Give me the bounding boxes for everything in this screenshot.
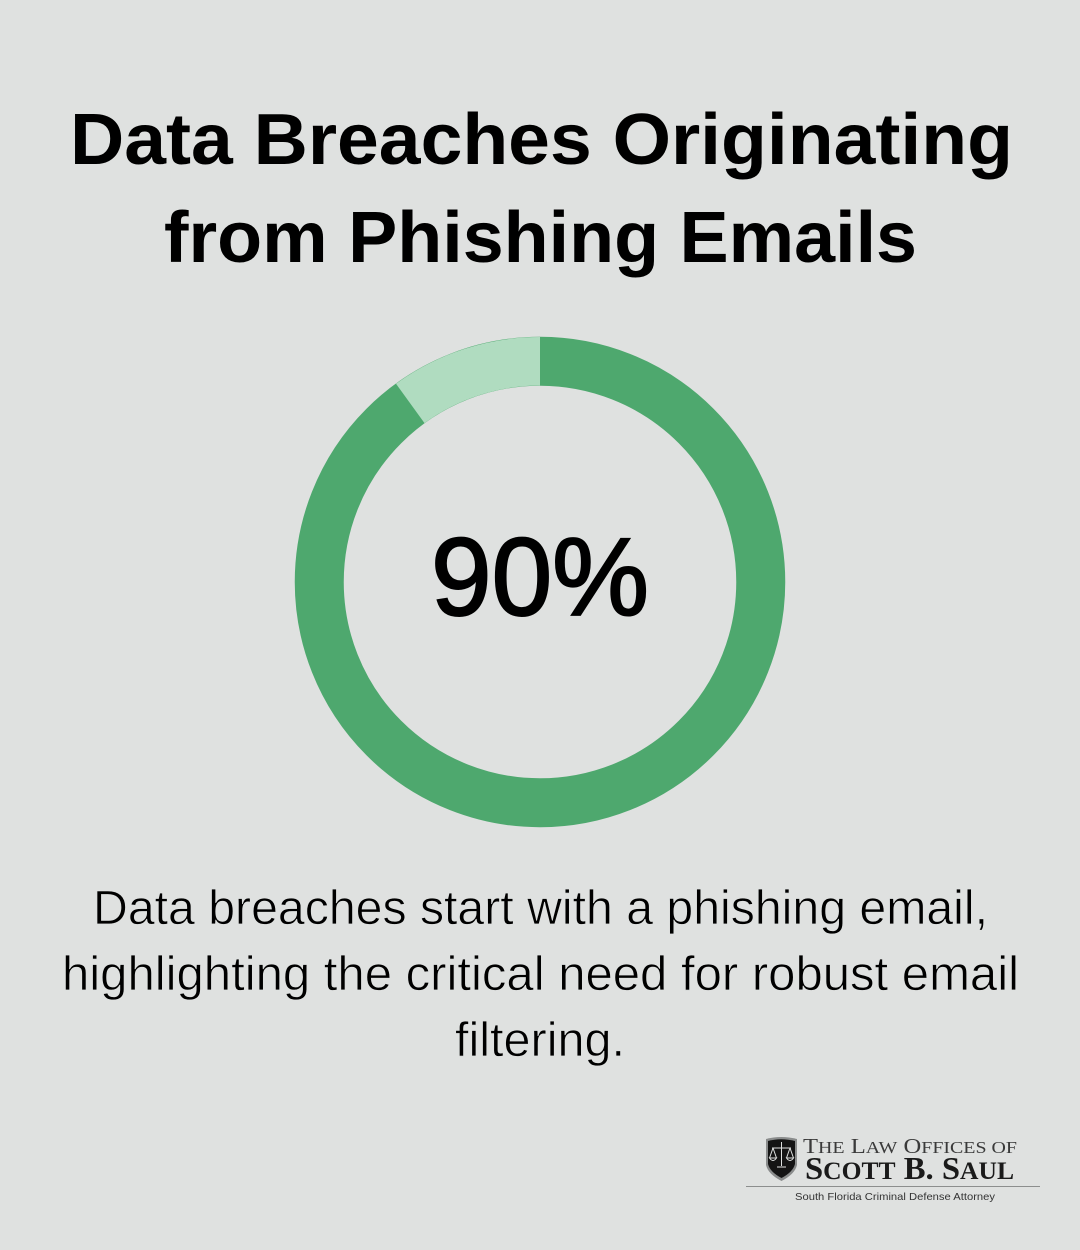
title: from Phishing Emails	[164, 198, 917, 278]
logo divider	[746, 1186, 1040, 1187]
logo text: Scott B. Saul: SCOTT B. SAUL	[805, 1150, 1014, 1186]
logo: Law Offices of Scott B. Saul	[746, 1134, 1040, 1203]
light segment: remaining 10 percent	[396, 337, 540, 423]
donut value: 90%	[431, 516, 649, 639]
description text	[62, 882, 1019, 1067]
title	[70, 100, 1013, 278]
title: Data Breaches Originating	[70, 100, 1013, 180]
logo tagline: South Florida Criminal Defense Attorney	[795, 1191, 996, 1203]
description text: highlighting the critical need for robust email	[62, 948, 1019, 1001]
description text: filtering.	[455, 1014, 625, 1067]
donut chart: 90 percent	[319, 337, 761, 803]
logo text: The Law Offices of: THE LAW OFFICES OF	[803, 1134, 1017, 1158]
icon: shield with scales	[766, 1137, 797, 1181]
description text: Data breaches start with a phishing email,	[93, 882, 988, 935]
